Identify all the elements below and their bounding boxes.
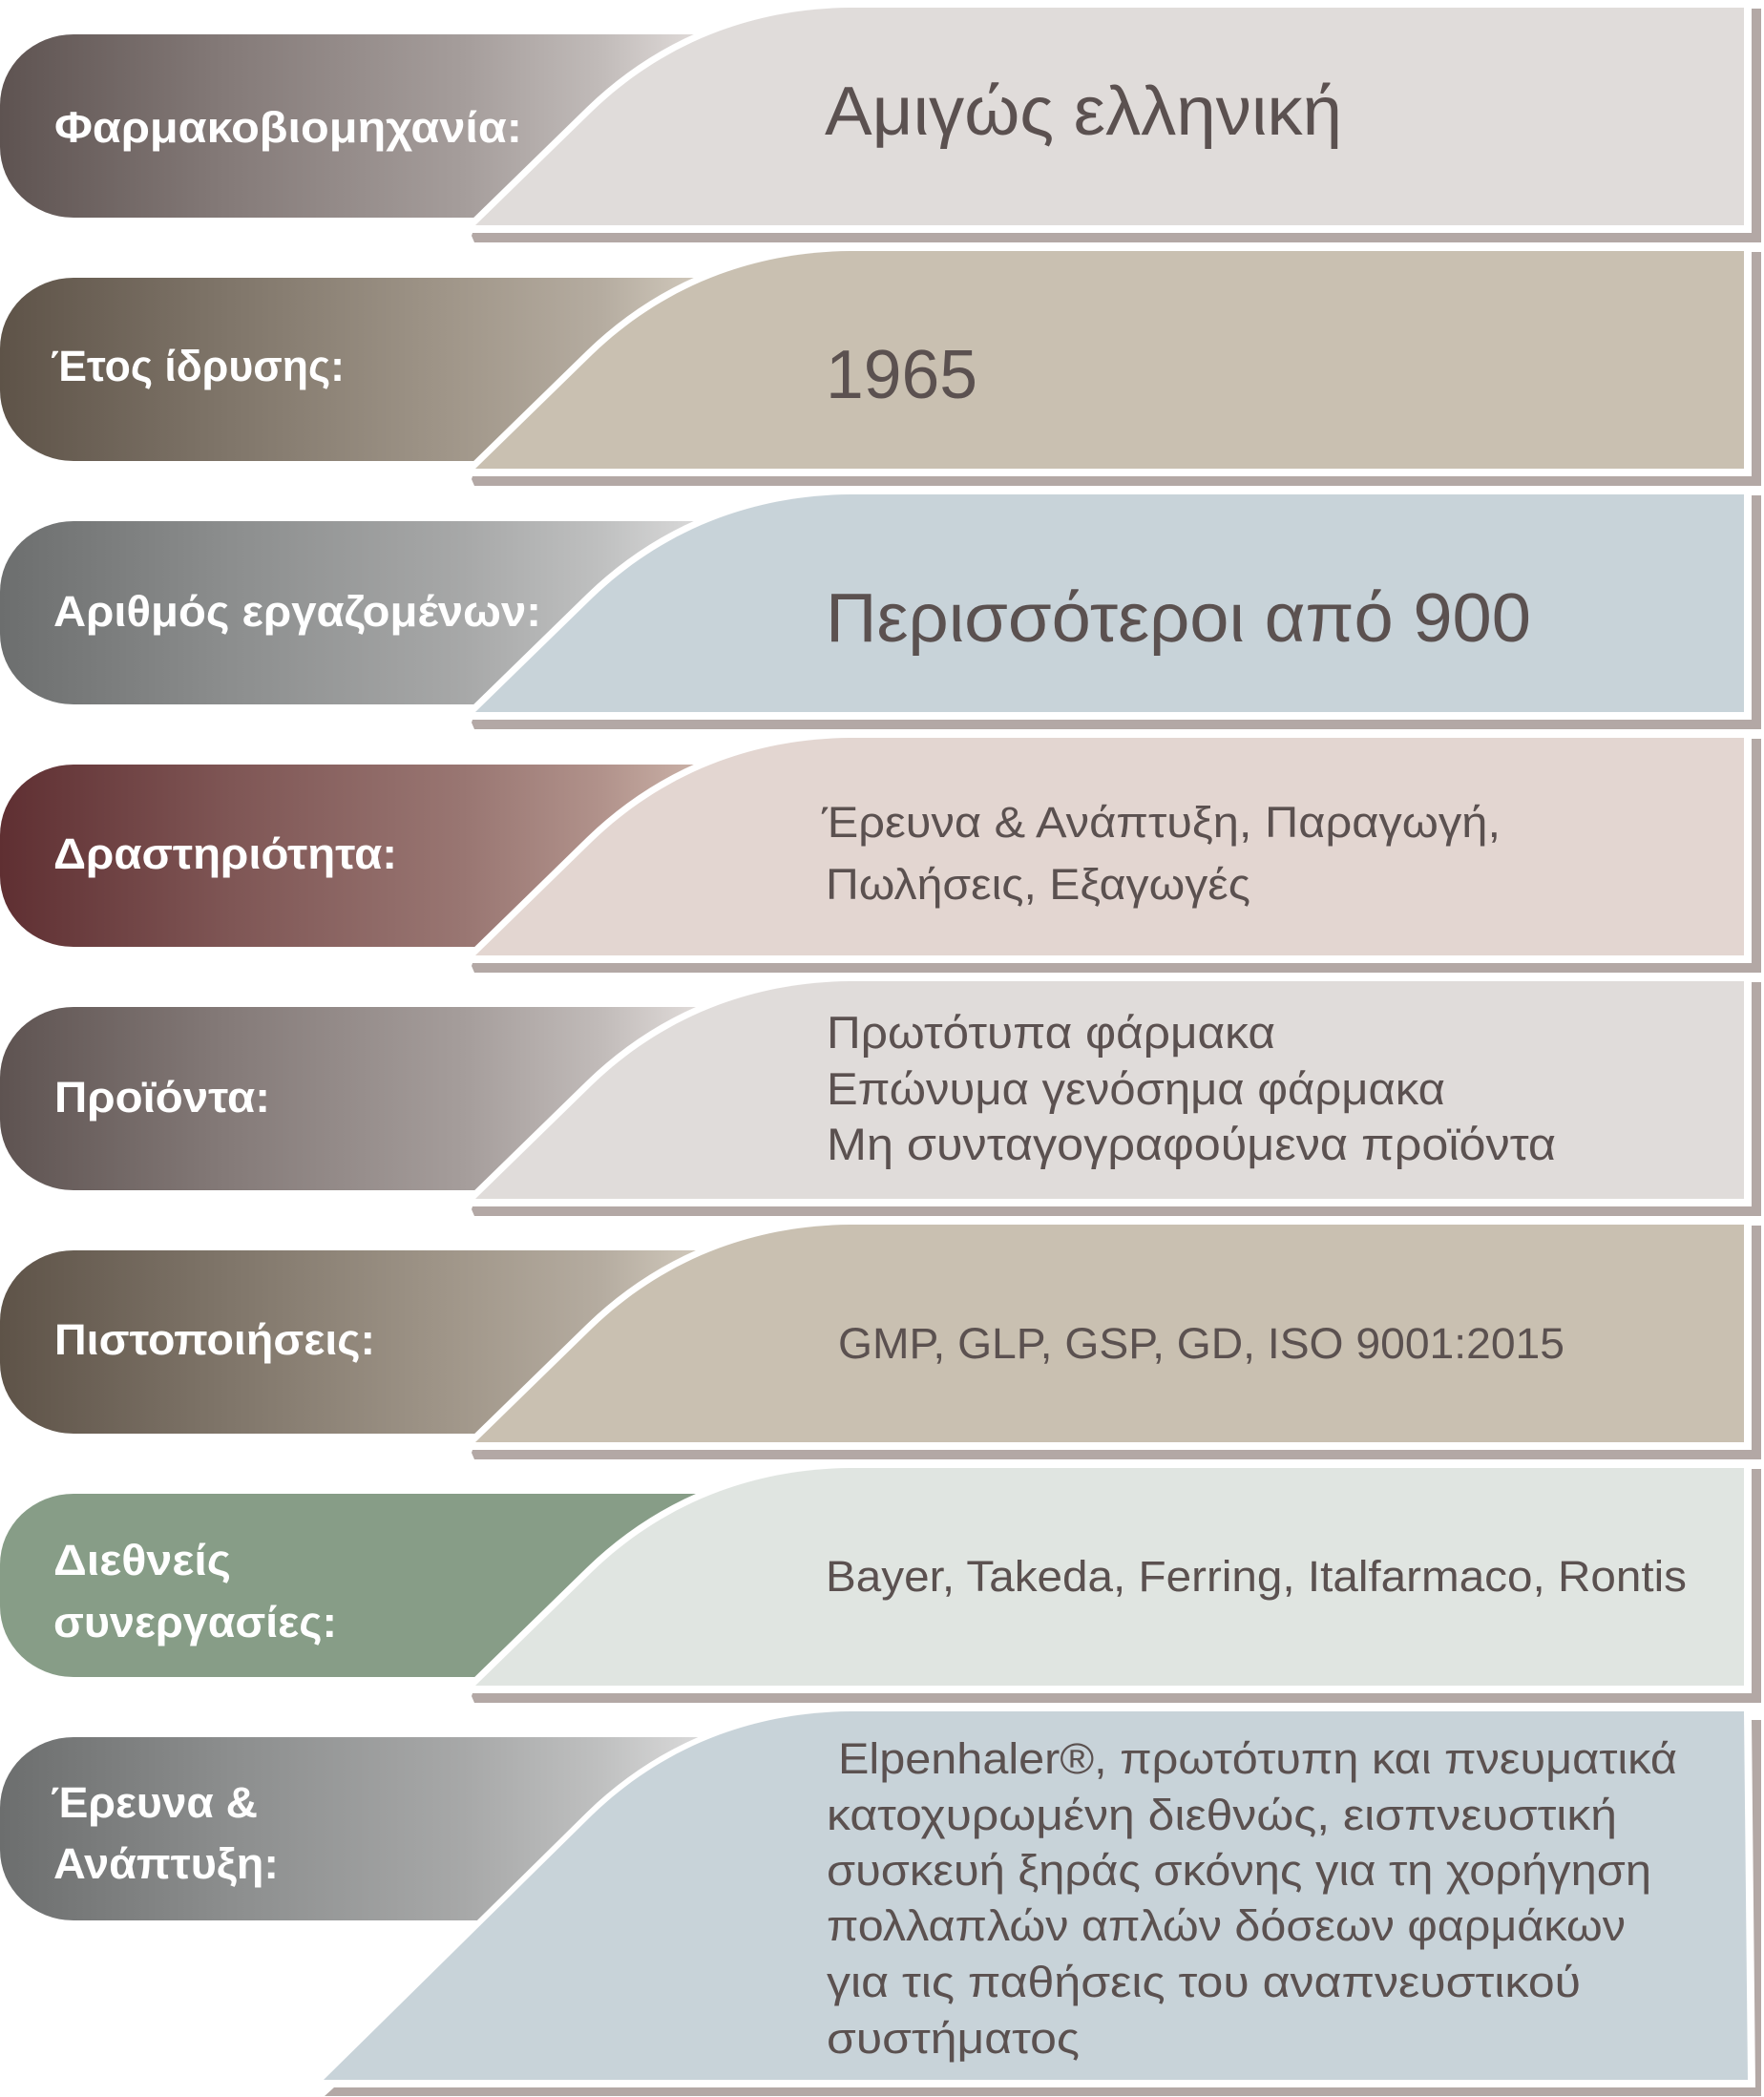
panel shadow bbox=[472, 252, 1761, 486]
label text bbox=[51, 1778, 279, 1888]
label text: Δραστηριότητα: bbox=[53, 829, 397, 878]
label text bbox=[53, 1536, 337, 1646]
label bar bbox=[0, 1250, 764, 1434]
value text: GMP, GLP, GSP, GD, ISO 9001:2015 bbox=[838, 1319, 1564, 1368]
row: Προϊόντα bbox=[0, 981, 1761, 1216]
value text: για τις παθήσεις του αναπνευστικού bbox=[827, 1958, 1581, 2006]
label text: συνεργασίες: bbox=[53, 1598, 337, 1646]
value text: Elpenhaler®, πρωτότυπη και πνευματικά bbox=[838, 1734, 1677, 1783]
label bar bbox=[0, 1494, 764, 1677]
value text: συσκευή ξηράς σκόνης για τη χορήγηση bbox=[827, 1846, 1651, 1895]
value panel bbox=[475, 494, 1744, 712]
value text: Περισσότεροι από 900 bbox=[826, 580, 1531, 657]
value panel bbox=[475, 981, 1744, 1199]
value text: πολλαπλών απλών δόσεων φαρμάκων bbox=[827, 1901, 1626, 1950]
value text: 1965 bbox=[826, 337, 977, 413]
value text bbox=[827, 1007, 1556, 1169]
row: Αριθμός εργαζομένων bbox=[0, 494, 1761, 729]
value text: Αμιγώς ελληνική bbox=[825, 73, 1342, 150]
label text: Ανάπτυξη: bbox=[53, 1839, 279, 1888]
row: Πιστοποιήσεις bbox=[0, 1225, 1761, 1459]
row: Φαρμακοβιομηχανία bbox=[0, 8, 1761, 242]
panel shadow bbox=[472, 1226, 1761, 1459]
label bar bbox=[0, 34, 764, 218]
panel shadow bbox=[472, 495, 1761, 729]
panel shadow bbox=[472, 982, 1761, 1216]
value text: Bayer, Takeda, Ferring, Italfarmaco, Rontis bbox=[826, 1552, 1687, 1601]
value panel bbox=[324, 1711, 1748, 2080]
row: Έτος ίδρυσης bbox=[0, 251, 1761, 486]
panel shadow bbox=[472, 739, 1761, 973]
value panel bbox=[475, 8, 1744, 225]
value text: Επώνυμα γενόσημα φάρμακα bbox=[827, 1063, 1445, 1114]
label bar bbox=[0, 765, 764, 947]
panel shadow bbox=[472, 9, 1761, 242]
row: Δραστηριότητα bbox=[0, 738, 1761, 973]
label text: Διεθνείς bbox=[53, 1536, 231, 1584]
value text: Έρευνα & Ανάπτυξη, Παραγωγή, bbox=[821, 798, 1501, 847]
value text: συστήματος bbox=[827, 2014, 1080, 2063]
label bar bbox=[0, 278, 764, 461]
label text: Αριθμός εργαζομένων: bbox=[53, 587, 541, 636]
row: Διεθνείς συνεργασίες bbox=[0, 1468, 1761, 1703]
value text bbox=[827, 1734, 1677, 2063]
value text: κατοχυρωμένη διεθνώς, εισπνευστική bbox=[827, 1791, 1617, 1839]
value text: Μη συνταγογραφούμενα προϊόντα bbox=[827, 1119, 1556, 1169]
value text bbox=[821, 798, 1501, 909]
label text: Έρευνα & bbox=[51, 1778, 258, 1827]
value text: Πρωτότυπα φάρμακα bbox=[827, 1007, 1275, 1058]
value panel bbox=[475, 738, 1744, 955]
row: Έρευνα & Ανάπτυξη bbox=[0, 1711, 1761, 2096]
label bar bbox=[0, 1007, 764, 1190]
value panel bbox=[475, 1468, 1744, 1686]
label bar bbox=[0, 521, 764, 704]
value text: Πωλήσεις, Εξαγωγές bbox=[826, 860, 1250, 909]
label text: Προϊόντα: bbox=[54, 1073, 270, 1122]
value panel bbox=[475, 1225, 1744, 1442]
label text: Έτος ίδρυσης: bbox=[51, 342, 345, 390]
value panel bbox=[475, 251, 1744, 469]
panel shadow bbox=[472, 1469, 1761, 1703]
label text: Φαρμακοβιομηχανία: bbox=[54, 103, 522, 152]
label bar bbox=[0, 1737, 764, 1920]
panel shadow bbox=[325, 1720, 1761, 2096]
label text: Πιστοποιήσεις: bbox=[54, 1315, 375, 1364]
